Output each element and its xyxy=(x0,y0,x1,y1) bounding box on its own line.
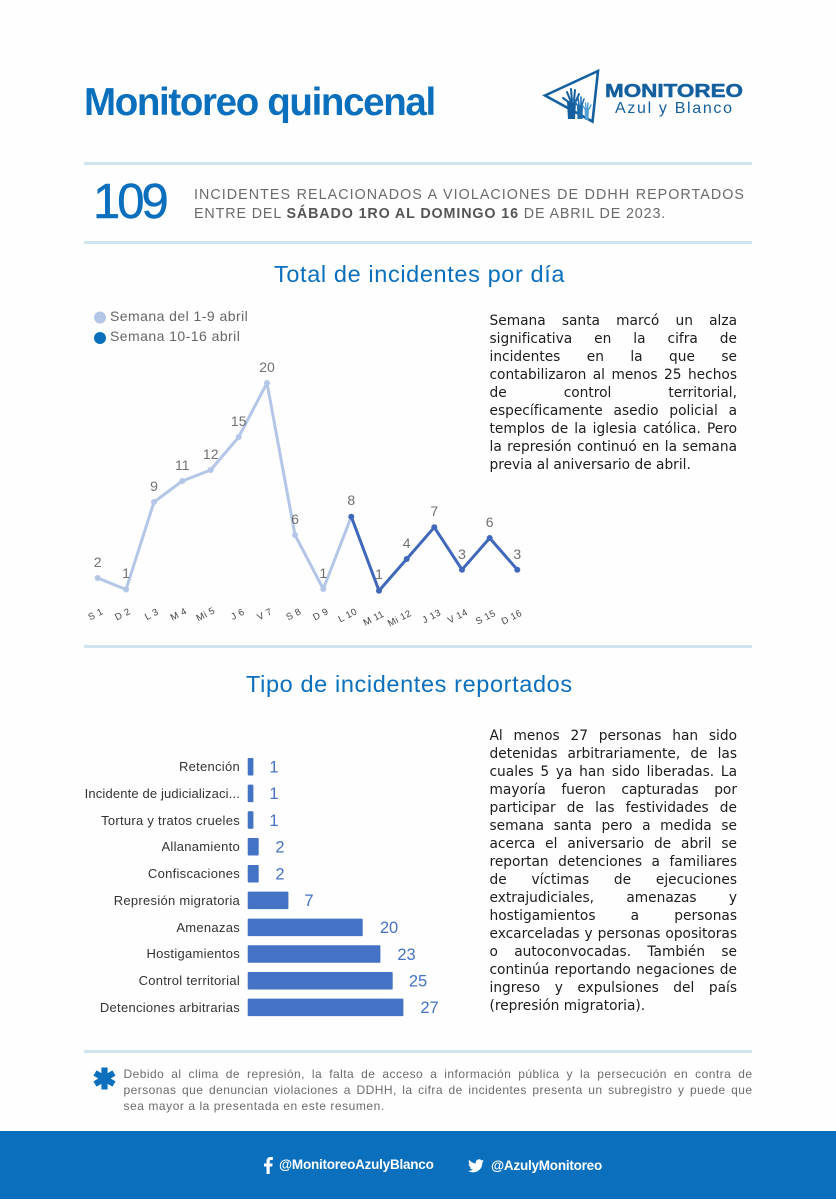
x axis labels: L 3 xyxy=(143,607,161,623)
data labels: 4 xyxy=(403,535,411,551)
twitter handle: @AzulyMonitoreo xyxy=(491,1158,602,1173)
bar values: 20 xyxy=(380,919,398,937)
bar values: 2 xyxy=(275,838,285,856)
paragraph: detenciones xyxy=(490,728,738,1014)
paragraph: semana santa xyxy=(490,313,737,473)
footnote: Debido al clima de represión, la falta de acceso a información pública y la persecución en contra de xyxy=(124,1067,752,1081)
x axis labels: Mi 12 xyxy=(386,608,414,629)
x axis labels: D 16 xyxy=(500,608,524,628)
paragraph: detenciones: semana santa pero a medida se xyxy=(490,818,737,834)
footer band xyxy=(0,1131,836,1199)
paragraph: detenciones: reportan detenciones a familiares xyxy=(490,854,737,870)
x axis labels: D 9 xyxy=(311,606,330,623)
data labels: 6 xyxy=(291,511,299,527)
legend: Semana del 1-9 abril xyxy=(110,308,248,324)
x axis labels: S 8 xyxy=(284,606,303,623)
data labels: 2 xyxy=(94,554,102,570)
data labels: 1 xyxy=(122,565,130,581)
x axis labels xyxy=(86,605,524,629)
x axis labels: J 13 xyxy=(421,607,443,626)
paragraph: semana santa: previa al aniversario de abril. xyxy=(490,457,691,473)
title: Monitoreo quincenal xyxy=(84,80,435,124)
paragraph: detenciones: (represión migratoria). xyxy=(490,998,645,1014)
x axis labels: J 6 xyxy=(229,607,247,623)
icon: twitter xyxy=(468,1159,484,1172)
bar values: 25 xyxy=(409,972,427,990)
logo wordmark: Azul y Blanco xyxy=(615,100,732,117)
paragraph: semana santa: Semana santa marcó un alza xyxy=(490,313,737,329)
bar values: 1 xyxy=(269,785,279,803)
line chart: incidentes por día xyxy=(86,308,524,629)
series: semana 10-16 abril xyxy=(348,514,520,594)
big number 109: 109 xyxy=(93,175,166,229)
icon: facebook xyxy=(264,1157,273,1174)
paragraph: detenciones: Al menos 27 personas han sido xyxy=(490,728,737,744)
category labels: Control territorial xyxy=(139,973,240,988)
bar values: 23 xyxy=(397,946,416,964)
x axis labels: D 2 xyxy=(113,606,132,623)
paragraph: detenciones: de víctimas de ejecuciones xyxy=(490,872,737,888)
heading: tipo de incidentes reportados: Tipo de incidentes reportados xyxy=(246,670,573,696)
data labels: 3 xyxy=(458,546,466,562)
data labels: 1 xyxy=(319,565,327,581)
icon: triangle frame with hands xyxy=(545,71,598,122)
paragraph: detenciones: detenidas arbitrariamente, de las xyxy=(490,746,737,762)
data labels: 7 xyxy=(430,503,438,519)
paragraph: detenciones: hostigamientos a personas xyxy=(490,908,737,924)
category labels xyxy=(85,759,240,1015)
x axis labels: M 11 xyxy=(362,609,386,629)
paragraph: detenciones: excarceladas y personas opositoras xyxy=(490,926,737,942)
logo: Monitoreo Azul y Blanco xyxy=(542,68,743,124)
footnote: personas que denuncian violaciones a DDHH, la cifra de incidentes presenta un subregistro y puede que xyxy=(124,1083,752,1097)
category labels: Hostigamientos xyxy=(146,946,240,961)
paragraph: detenciones: extrajudiciales, amenazas y xyxy=(490,890,737,906)
paragraph: semana santa: templos de la iglesia católica. Pero xyxy=(490,421,737,437)
x axis labels: S 15 xyxy=(474,608,498,627)
x axis labels: S 1 xyxy=(86,606,105,623)
bars xyxy=(248,758,403,1016)
x axis labels: M 4 xyxy=(169,606,189,624)
paragraph: semana santa: de control territorial, xyxy=(490,385,737,401)
summary text: ENTRE DEL SÁBADO 1RO AL DOMINGO 16 DE ABRIL DE 2023. xyxy=(194,206,666,222)
data labels: 11 xyxy=(175,457,190,473)
data labels: 20 xyxy=(259,359,275,375)
legend: Semana 10-16 abril xyxy=(110,328,240,344)
paragraph: detenciones: o autoconvocadas. También se xyxy=(490,944,737,960)
bar values: 27 xyxy=(420,999,439,1017)
summary text xyxy=(194,186,745,222)
x axis labels: L 10 xyxy=(337,606,359,625)
icon: asterisk xyxy=(94,1068,116,1090)
bar values: 2 xyxy=(275,866,285,884)
bar values: 1 xyxy=(269,758,279,776)
x axis labels: Mi 5 xyxy=(195,605,217,624)
category labels: Amenazas xyxy=(176,920,240,935)
data labels: 8 xyxy=(347,492,355,508)
bar values xyxy=(269,758,439,1017)
category labels: Detenciones arbitrarias xyxy=(100,1000,240,1015)
paragraph: semana santa: específicamente asedio policial a xyxy=(490,403,737,419)
bar chart: tipo de incidentes xyxy=(85,758,439,1017)
bar values: 1 xyxy=(269,812,279,830)
data labels: 6 xyxy=(486,514,494,530)
logo wordmark xyxy=(605,81,743,117)
facebook handle: @MonitoreoAzulyBlanco xyxy=(279,1157,434,1172)
category labels: Allanamiento xyxy=(161,839,240,854)
data labels: 3 xyxy=(513,546,521,562)
data labels xyxy=(94,359,521,582)
paragraph: semana santa: incidentes en la que se xyxy=(490,349,737,365)
data labels: 15 xyxy=(231,413,247,429)
paragraph: semana santa: significativa en la cifra de xyxy=(490,331,737,347)
paragraph: detenciones: continúa reportando negaciones de xyxy=(490,962,737,978)
data labels: 9 xyxy=(150,478,158,494)
data labels: 1 xyxy=(375,566,383,582)
category labels: Confiscaciones xyxy=(148,866,240,881)
paragraph: semana santa: contabilizaron al menos 25 hechos xyxy=(490,367,737,383)
legend xyxy=(94,308,248,344)
series: semana 1-9 abril xyxy=(95,380,351,592)
footnote: sea mayor a la presentada en este resumen. xyxy=(124,1099,385,1113)
paragraph: detenciones: cuales 5 ya han sido liberadas. La xyxy=(490,764,737,780)
category labels: Represión migratoria xyxy=(114,893,240,908)
x axis labels: V 14 xyxy=(446,607,470,626)
category labels: Incidente de judicializaci... xyxy=(85,786,240,801)
category labels: Retención xyxy=(179,759,240,774)
paragraph: semana santa: la represión continuó en la semana xyxy=(490,439,737,455)
paragraph: detenciones: mayoría fueron capturadas por xyxy=(490,782,737,798)
footnote xyxy=(124,1067,752,1113)
paragraph: detenciones: participar de las festividades de xyxy=(490,800,737,816)
x axis labels: V 7 xyxy=(255,606,274,623)
logo wordmark: MONITOREO xyxy=(605,81,743,101)
summary text: INCIDENTES RELACIONADOS A VIOLACIONES DE DDHH REPORTADOS xyxy=(194,186,745,202)
heading: total de incidentes por día: Total de incidentes por día xyxy=(274,261,565,287)
paragraph: detenciones: ingreso y expulsiones del país xyxy=(490,980,737,996)
data labels: 12 xyxy=(203,446,219,462)
category labels: Tortura y tratos crueles xyxy=(101,813,240,828)
bar values: 7 xyxy=(304,892,314,910)
paragraph: detenciones: acerca el aniversario de abril se xyxy=(490,836,737,852)
